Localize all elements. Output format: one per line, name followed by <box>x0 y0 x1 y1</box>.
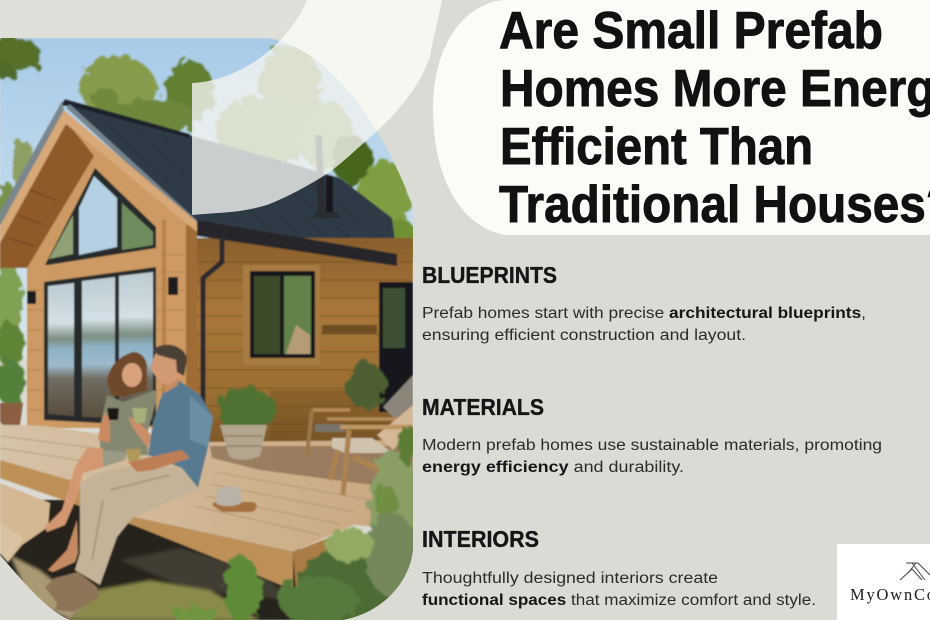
eave and fascia <box>197 220 397 266</box>
chimney <box>312 135 342 218</box>
pants <box>75 465 197 585</box>
neck <box>164 380 180 394</box>
skirt <box>100 450 127 467</box>
body: interiors: functional spaces that maximize comfort and style. <box>422 592 816 609</box>
title: Are Small Prefab <box>499 2 883 60</box>
large potted plant <box>218 387 277 460</box>
lower leg back <box>48 520 78 572</box>
wooden chairs <box>307 375 413 495</box>
body: materials <box>422 437 882 476</box>
ground shadow under deck <box>0 500 300 620</box>
thigh and leg <box>45 448 103 532</box>
roof <box>72 106 395 240</box>
left potted plant <box>0 359 25 425</box>
body: materials: energy efficiency and durability. <box>422 459 684 476</box>
torso <box>100 390 157 455</box>
far door <box>379 282 413 412</box>
section: materials <box>422 394 882 476</box>
body: blueprints: ensuring efficient construction and layout. <box>422 327 746 344</box>
title panel: Efficient Than <box>500 118 813 176</box>
gable window <box>45 168 156 265</box>
body: interiors: Thoughtfully designed interiors create <box>422 570 718 587</box>
heading: materials: MATERIALS <box>422 394 544 420</box>
decorative white blob <box>192 0 442 215</box>
soffit <box>0 118 94 268</box>
boot <box>45 572 100 612</box>
rear plant <box>346 363 386 409</box>
translucent blob over photo <box>192 0 442 215</box>
wall lamps <box>168 277 178 295</box>
woman <box>45 352 157 572</box>
body: materials: Modern prefab homes use sustainable materials, promoting <box>422 437 882 454</box>
face <box>150 352 185 385</box>
top band <box>0 0 320 38</box>
icon: roof lines <box>900 563 930 580</box>
deck face <box>0 460 293 590</box>
heading: blueprints: BLUEPRINTS <box>422 262 557 288</box>
sky <box>0 38 413 358</box>
body: blueprints: Prefab homes start with precise architectural blueprints , <box>422 305 866 322</box>
shirt <box>148 380 213 488</box>
heading: interiors: INTERIORS <box>422 526 539 552</box>
cups <box>132 408 147 423</box>
cup <box>107 408 119 420</box>
foreground foliage <box>173 425 426 620</box>
trees <box>0 37 418 367</box>
side window <box>250 271 315 358</box>
man <box>45 345 213 612</box>
arms <box>98 412 110 443</box>
body: blueprints <box>422 305 866 344</box>
forearm <box>128 450 190 472</box>
gable wall <box>27 122 197 428</box>
right wall <box>197 238 413 448</box>
section: blueprints <box>422 262 866 344</box>
sliding glass door <box>44 267 156 426</box>
section: interiors <box>422 526 816 609</box>
logo <box>837 544 930 620</box>
steps <box>0 483 50 562</box>
mug and tray <box>213 486 256 512</box>
photo: couple on cabin deck <box>0 37 426 620</box>
hair <box>153 345 187 376</box>
deck surface <box>0 424 413 552</box>
hair <box>107 352 147 397</box>
title panel <box>433 0 930 235</box>
downpipe <box>203 237 222 420</box>
body: interiors <box>422 570 816 609</box>
face <box>122 363 142 387</box>
